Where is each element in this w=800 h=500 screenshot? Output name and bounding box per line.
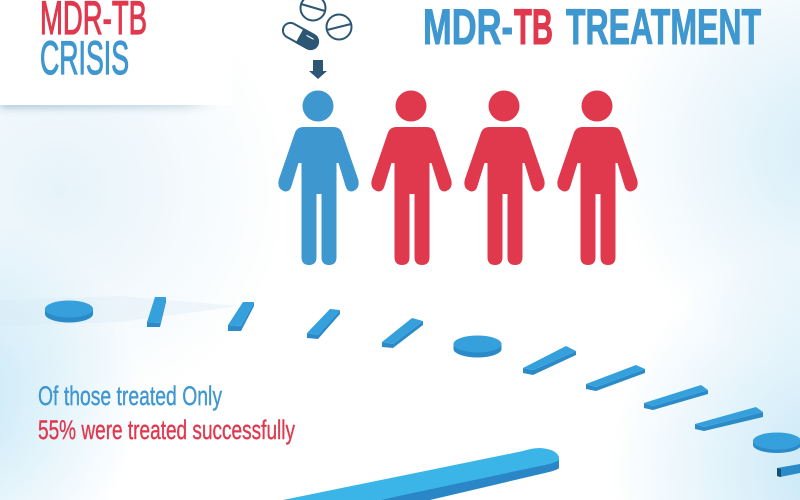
person: red 3 [557,90,638,265]
tick 3 [307,309,340,339]
icon: down arrow [309,60,327,79]
tick 5 [523,346,576,375]
tick 2 [228,302,254,331]
tick 6 [586,365,645,391]
dial hand [283,448,559,500]
heading: MDR-TB treatment: TB [514,0,553,55]
text: 55 percent successful: 55% were treated successfully [38,415,295,445]
heading: MDR-TB treatment [423,0,761,55]
text: of those treated: Of those treated Only [38,381,222,411]
tick 7 [644,385,708,410]
tick 1 [147,297,166,327]
person: red 1 [371,90,452,265]
icon: capsule [280,20,321,52]
icon: tablet right [326,14,352,40]
title: CRISIS: CRISIS [40,31,129,84]
person: red 2 [464,90,545,265]
icon: pills [280,0,352,52]
person: treated blue [278,90,359,265]
disc centre [454,336,502,358]
disc right [753,432,800,453]
3D dial ticks [45,297,800,500]
panel: title card [0,0,232,108]
heading: MDR-TB treatment: MDR- [423,0,513,55]
icon: tablet top [300,0,326,20]
tick 9 [777,464,800,477]
disc left [45,300,93,322]
tick 8 [695,407,763,431]
tick 4 [382,318,423,348]
